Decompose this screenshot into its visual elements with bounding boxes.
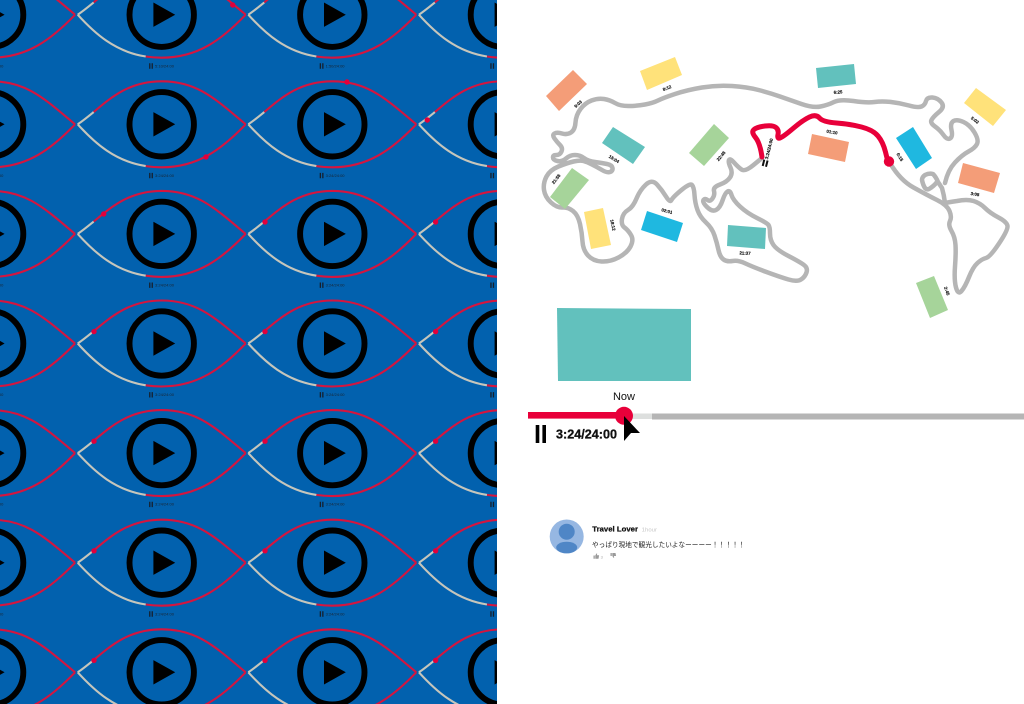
stop: teal card 2: [727, 225, 766, 249]
stop: yellow card 2: [584, 208, 611, 249]
icon: thumbs down: [610, 553, 616, 558]
label 5:02: 5:02: [970, 115, 980, 125]
eye row 6 column 4: [419, 520, 587, 617]
eye row 3 column 3: [248, 191, 416, 288]
eye row 2 column 2: [78, 81, 246, 178]
eye row 1 column 3: [248, 0, 416, 69]
eye row 6 column 1: [0, 520, 75, 617]
remaining track: [652, 414, 1024, 420]
red route: travelled part: [753, 116, 888, 162]
playhead: [615, 407, 633, 425]
icon: thumbs up with count: [594, 553, 604, 559]
avatar: [550, 520, 584, 554]
eye row 6 column 3: 3:24/24:00: [326, 611, 345, 616]
eye row 2 column 2: 3:24/24:00: [155, 173, 175, 178]
eye row 4 column 2: [78, 300, 246, 398]
eye row 5 column 3: 3:24/24:00: [326, 502, 345, 507]
eye row 6 column 3: [248, 520, 416, 617]
stop: yellow card 3: [964, 88, 1006, 126]
eye row 6 column 2: [78, 520, 246, 617]
red route position dot: [884, 156, 894, 167]
eye row 7 column 4: [419, 629, 587, 704]
eye row 4 column 1: [0, 300, 75, 398]
stop: teal card 3: [816, 64, 856, 88]
label 21:55: 21:55: [551, 173, 562, 185]
label 6:25: 6:25: [833, 89, 843, 95]
stop: teal card 1: [602, 127, 645, 164]
buffered track: [630, 414, 652, 419]
grey route: Americas: [890, 163, 1008, 292]
eye row 7 column 2: [78, 629, 246, 704]
panel: blue repeating eye pattern: [0, 0, 497, 704]
eye row 5 column 2: 3:24/24:00: [155, 502, 175, 507]
eye row 3 column 1: [0, 191, 75, 288]
label 01:10: 01:10: [826, 129, 838, 136]
label 0:15: 0:15: [896, 152, 905, 163]
eye row 5 column 4: [419, 410, 587, 507]
commenter name: Travel Lover: [592, 525, 638, 534]
video thumbnail placeholder: [557, 308, 691, 381]
eye row 3 column 2: [78, 191, 246, 288]
small pause and time label on route: [762, 137, 774, 167]
label 2:45: 2:45: [943, 286, 951, 297]
stop: orange card 1: [546, 70, 587, 111]
label 21:37: 21:37: [739, 250, 751, 256]
label 9:03: 9:03: [573, 99, 583, 109]
eye row 3 column 3: 3:24/24:00: [326, 282, 345, 287]
panel: world map route with stops: [544, 57, 1008, 318]
icon: pause: [536, 425, 546, 443]
eye row 1 column 4: [419, 0, 587, 69]
eye row 4 column 3: [248, 300, 416, 398]
eye row 4 column 4: [419, 300, 587, 398]
label 18:12: 18:12: [609, 219, 617, 232]
stop: blue card 2: [896, 127, 932, 169]
label 02:01: 02:01: [661, 207, 674, 215]
grey route: North America, Asia, Africa, Australia: [544, 86, 978, 281]
comment block: [550, 520, 745, 559]
eye row 4 column 2: 3:24/24:00: [155, 392, 175, 397]
small pause and time label on route: 3:24/24:00: [764, 137, 774, 160]
icon: mouse cursor: [624, 416, 640, 441]
label 8:12: 8:12: [662, 84, 673, 92]
eye row 2 column 3: [248, 79, 416, 178]
eye row 2 column 1: [0, 81, 75, 178]
eye row 1 column 1: [0, 0, 75, 69]
stop: green card 1: [689, 124, 729, 166]
label 22:45: 22:45: [716, 150, 727, 162]
stop: green card 3: [916, 276, 948, 318]
eye row 5 column 1: [0, 410, 75, 507]
time counter: 3:24/24:00: [556, 428, 617, 442]
progress bar: [528, 407, 1024, 425]
eye row 3 column 2: 3:24/24:00: [155, 282, 175, 287]
eye row 1 column 2: 5:10/24:00: [155, 63, 175, 68]
eye row 7 column 3: [248, 629, 416, 704]
eye row 2 column 4: [419, 81, 587, 178]
stop: orange card 2: [808, 134, 849, 162]
eye row 2 column 3: 3:24/24:00: [326, 173, 345, 178]
eye row 5 column 3: [248, 410, 416, 507]
stop: green card 2: [550, 168, 589, 209]
comment age: 1hour: [642, 528, 657, 534]
eye row 5 column 2: [78, 410, 246, 507]
label 3:08: 3:08: [970, 191, 980, 197]
stop: blue card 1: [641, 211, 683, 242]
stop: orange card 3: [958, 163, 1000, 193]
played track: [528, 412, 624, 419]
comment text: やっぱり現地で観光したいよなーーーー！！！！！: [592, 540, 745, 549]
eye row 6 column 2: 3:24/24:00: [155, 611, 175, 616]
label 15:04: 15:04: [608, 154, 621, 164]
eye row 7 column 1: [0, 629, 75, 704]
eye row 3 column 4: [419, 191, 587, 288]
eye row 1 column 3: 1:50/24:00: [326, 63, 345, 68]
eye row 1 column 2: [78, 0, 246, 69]
stop: yellow card 1: [640, 57, 682, 90]
eye row 4 column 3: 3:24/24:00: [326, 392, 345, 397]
icon: thumbs up with count: 3: [601, 554, 604, 559]
label: Now: Now: [613, 391, 635, 403]
